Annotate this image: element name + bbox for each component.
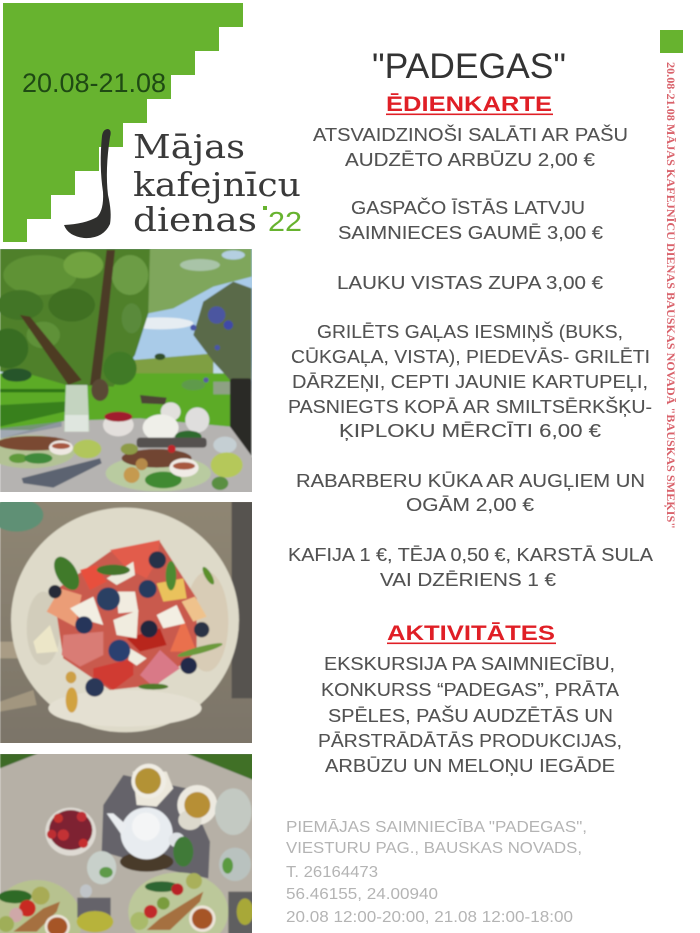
heading: Ēdienkarte: ĒDIENKARTE: [386, 93, 552, 116]
menu item: grilled skewer: ĶIPLOKU MĒRCĪTI 6,00 €: [339, 421, 601, 441]
menu item: grilled skewer: [288, 321, 652, 441]
menu item: drinks: VAI DZĒRIENS 1 €: [380, 570, 556, 590]
logo wordmark: [133, 127, 302, 239]
activities text: [318, 654, 622, 776]
menu item: drinks: KAFIJA 1 €, TĒJA 0,50 €, KARSTĀ SULA: [288, 545, 653, 565]
photo: garden table with tree: [0, 245, 253, 495]
activities text: KONKURSS “PADEGAS”, PRĀTA: [321, 680, 619, 700]
activities text: EKSKURSIJA PA SAIMNIECĪBU,: [324, 654, 615, 674]
logo wordmark: Mājas: [133, 127, 245, 166]
contact information: T. 26164473: [286, 864, 378, 881]
activities text: ARBŪZU UN MELOŅU IEGĀDE: [325, 756, 615, 776]
menu item: chicken soup: LAUKU VISTAS ZUPA 3,00 €: [337, 273, 603, 293]
menu item: gazpacho: GASPAČO ĪSTĀS LATVJU: [351, 197, 585, 218]
green stepped shape: [3, 3, 243, 242]
menu item: salad: [313, 124, 628, 170]
logo wordmark: dienas: [133, 200, 257, 239]
contact information: 56.46155, 24.00940: [286, 886, 438, 903]
photo: tea and grilled skewers table: [0, 752, 253, 933]
contact information: VIESTURU PAG., BAUSKAS NOVADS,: [286, 840, 582, 857]
vertical side text: 20.08-21.08 MĀJAS KAFEJNĪCU DIENAS BAUSKAS NOVADĀ "BAUSKAS SMEĶIS": [663, 62, 678, 529]
menu item: grilled skewer: GRILĒTS GAĻAS IESMIŅŠ (BUKS,: [317, 321, 623, 342]
menu list: [288, 124, 653, 590]
menu item: grilled skewer: DĀRZEŅI, CEPTI JAUNIE KARTUPEĻI,: [292, 372, 648, 392]
menu item: drinks: [288, 545, 653, 590]
contact information: [286, 819, 587, 926]
menu item: salad: ATSVAIDZINOŠI SALĀTI AR PAŠU: [313, 124, 628, 145]
green square accent: [660, 30, 683, 53]
menu item: rhubarb cake: OGĀM 2,00 €: [406, 495, 534, 515]
menu item: salad: AUDZĒTO ARBŪZU 2,00 €: [345, 150, 595, 170]
menu item: rhubarb cake: [296, 471, 645, 515]
menu item: grilled skewer: PASNIEGTS KOPĀ AR SMILTSĒRKŠĶU-: [288, 396, 652, 417]
title: "PADEGAS": [372, 47, 566, 86]
photo: watermelon salad plate: [0, 495, 253, 745]
logo wordmark: 22: [268, 206, 302, 237]
contact information: 20.08 12:00-20:00, 21.08 12:00-18:00: [286, 909, 573, 926]
menu item: rhubarb cake: RABARBERU KŪKA AR AUGĻIEM UN: [296, 471, 645, 491]
logo wordmark: kafejnīcu: [133, 165, 301, 204]
menu item: gazpacho: SAIMNIECES GAUMĒ 3,00 €: [338, 223, 603, 243]
heading: Aktivitātes: AKTIVITĀTES: [387, 622, 555, 645]
contact information: PIEMĀJAS SAIMNIECĪBA "PADEGAS",: [286, 819, 587, 836]
date heading: 20.08-21.08: [22, 68, 166, 98]
icon: ladle: [64, 129, 111, 238]
activities text: SPĒLES, PAŠU AUDZĒTĀS UN: [328, 705, 613, 726]
menu item: grilled skewer: CŪKGAĻA, VISTA), PIEDEVĀS- GRILĒTI: [291, 347, 650, 367]
menu item: gazpacho: [338, 197, 603, 243]
activities text: PĀRSTRĀDĀTĀS PRODUKCIJAS,: [318, 731, 622, 751]
logo: Mājas kafejnīcu dienas 22: [64, 127, 302, 239]
